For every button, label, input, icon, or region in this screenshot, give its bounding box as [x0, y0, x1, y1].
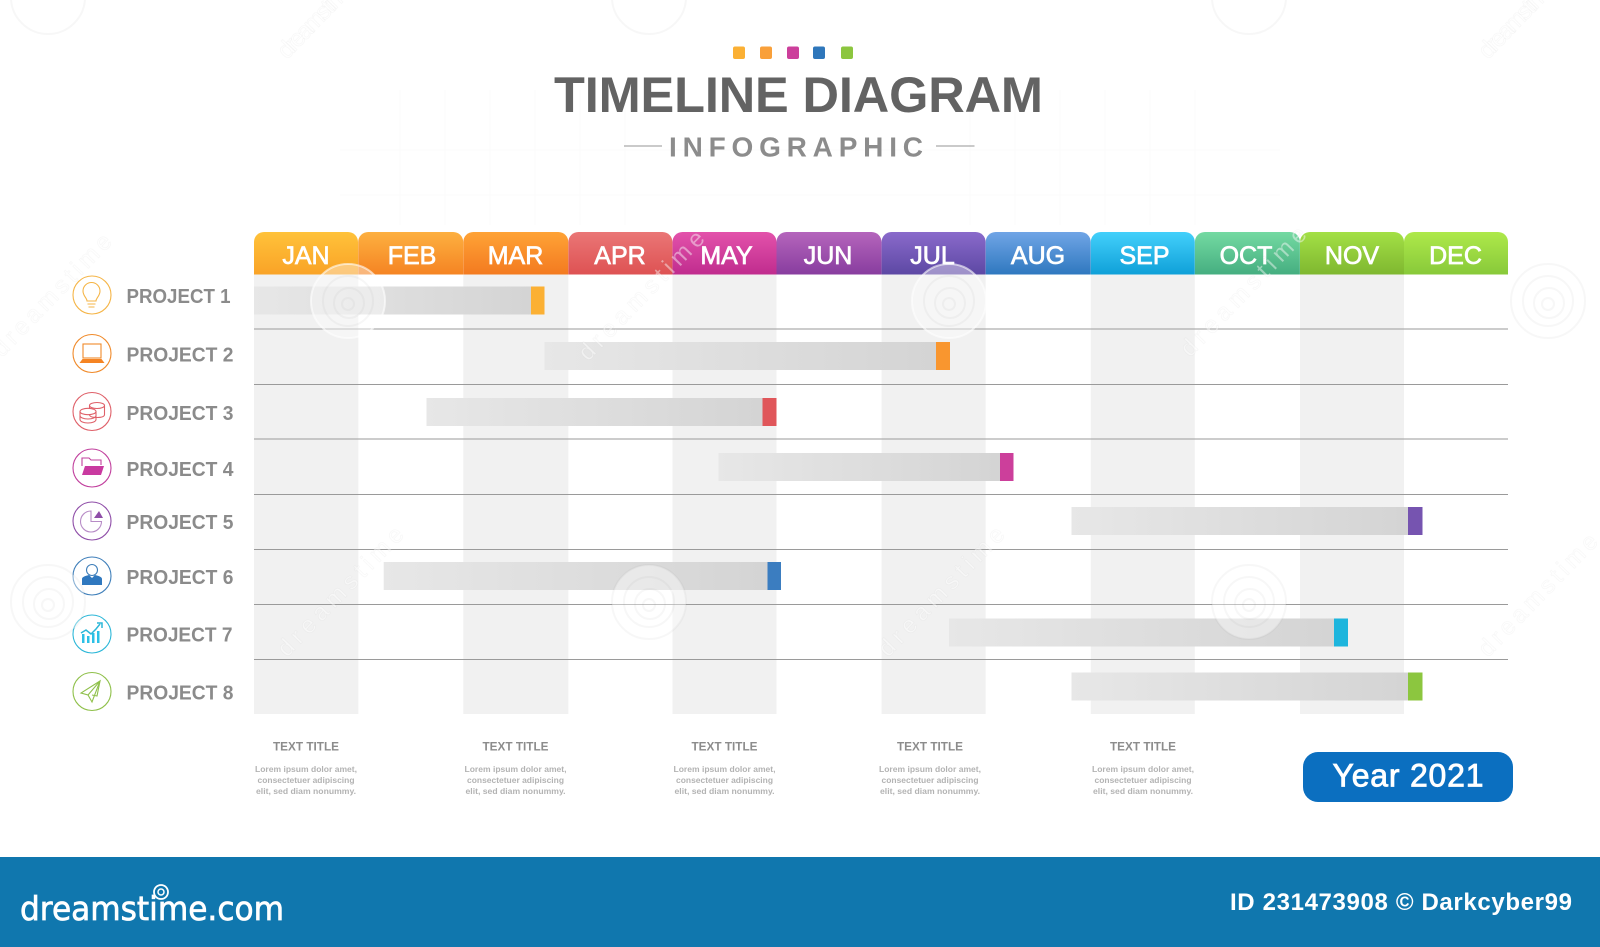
month: NOV [1300, 232, 1404, 274]
month: MAY: MAY [700, 242, 753, 270]
text block 5: consectetuer adipiscing [1094, 775, 1192, 785]
label: PROJECT 8 [126, 682, 234, 704]
text block 5: Lorem ipsum dolor amet, [1092, 764, 1194, 774]
label: PROJECT 7 [126, 624, 232, 646]
text block 3: TEXT TITLE [692, 740, 758, 754]
month: JUL: JUL [910, 242, 955, 270]
subheading: INFOGRAPHIC [669, 132, 923, 162]
project 7 bar [949, 618, 1348, 646]
panel: gantt chart [254, 232, 1508, 714]
text block 2: Lorem ipsum dolor amet, [464, 764, 566, 774]
month: DEC: DEC [1429, 242, 1482, 270]
year badge: Year 2021 [1332, 758, 1484, 794]
month: SEP [1091, 232, 1195, 274]
text block 1: elit, sed diam nonummy. [256, 786, 356, 796]
month: JUL [882, 232, 986, 274]
month: JAN [254, 232, 358, 274]
text block 1: TEXT TITLE [273, 740, 339, 754]
project 1 row [73, 276, 230, 314]
text block 2: consectetuer adipiscing [467, 775, 564, 785]
month: SEP: SEP [1119, 242, 1170, 270]
project 7 row [73, 615, 232, 653]
month: APR: APR [594, 242, 646, 270]
text block 2: TEXT TITLE [482, 740, 548, 754]
project 2 bar [544, 342, 950, 370]
text block 3: consectetuer adipiscing [676, 775, 773, 785]
label: PROJECT 4 [126, 459, 234, 481]
text block 1 [255, 740, 357, 796]
project 4 row [73, 449, 234, 487]
project 6 bar [384, 562, 781, 590]
project 3 row [73, 392, 234, 430]
text block 1: Lorem ipsum dolor amet, [255, 764, 357, 774]
text: dreamstime [272, 521, 409, 662]
text block 4: elit, sed diam nonummy. [880, 786, 980, 796]
icon: folder [73, 449, 111, 487]
icon: paper plane [73, 672, 111, 710]
label: PROJECT 1 [126, 286, 230, 308]
text block 2: elit, sed diam nonummy. [466, 786, 566, 796]
project 8 bar [1072, 672, 1422, 700]
text block 4: Lorem ipsum dolor amet, [879, 764, 981, 774]
year badge [1303, 752, 1513, 802]
month: MAR: MAR [488, 242, 543, 270]
label: PROJECT 3 [126, 403, 234, 425]
project list [73, 276, 234, 710]
month: APR [568, 232, 672, 274]
project 4 bar [718, 453, 1014, 481]
text: dreamstime [873, 521, 1010, 662]
month: JUN [776, 232, 882, 274]
title block [554, 46, 1043, 162]
text block 4: consectetuer adipiscing [882, 775, 978, 785]
month header row [254, 232, 1508, 274]
icon: person [73, 557, 111, 595]
month: OCT [1195, 232, 1300, 274]
main heading: TIMELINE DIAGRAM [554, 66, 1043, 123]
logo: dreamstime.com: dreamstime.com [20, 889, 284, 928]
image credit: ID 231473908 © Darkcyber99 [1230, 889, 1572, 916]
icon: growth chart [73, 615, 111, 653]
icon: laptop [73, 334, 111, 372]
label: PROJECT 5 [126, 512, 234, 534]
month: OCT: OCT [1220, 242, 1272, 270]
month: NOV: NOV [1325, 242, 1379, 270]
text: dreamstime [1473, 528, 1600, 662]
month: DEC [1404, 232, 1508, 274]
month: JUN: JUN [804, 242, 852, 270]
project 6 row [73, 557, 234, 595]
text block 3: elit, sed diam nonummy. [674, 786, 774, 796]
project 5 row [73, 502, 234, 540]
icon: coins [73, 392, 111, 430]
project 3 bar [426, 398, 776, 426]
project 2 row [73, 334, 234, 372]
month: MAY [672, 232, 776, 274]
label: PROJECT 6 [126, 567, 234, 589]
text block 4 [879, 740, 981, 796]
icon: light bulb [73, 276, 111, 314]
text block 5: TEXT TITLE [1110, 740, 1176, 754]
month: AUG: AUG [1011, 242, 1065, 270]
month: JAN: JAN [282, 242, 330, 270]
month: FEB [358, 232, 463, 274]
decorative colour squares [733, 46, 853, 59]
text block 3 [674, 740, 776, 796]
project 5 bar [1072, 507, 1422, 535]
text: dreamstime [573, 225, 710, 366]
footer band [0, 857, 1600, 947]
icon: pie chart [73, 502, 111, 540]
text block 1: consectetuer adipiscing [258, 775, 354, 785]
month: AUG [986, 232, 1091, 274]
label: PROJECT 2 [126, 344, 234, 366]
text block 4: TEXT TITLE [897, 740, 963, 754]
text block 2 [464, 740, 566, 796]
project 8 row [73, 672, 234, 710]
month: FEB: FEB [388, 242, 436, 270]
text block 3: Lorem ipsum dolor amet, [674, 764, 776, 774]
project 1 bar [254, 286, 544, 314]
alternating month columns [254, 274, 1404, 714]
month: MAR [463, 232, 568, 274]
text block 5 [1092, 740, 1194, 796]
text: dreamstime [1175, 221, 1312, 362]
text block 5: elit, sed diam nonummy. [1093, 786, 1193, 796]
